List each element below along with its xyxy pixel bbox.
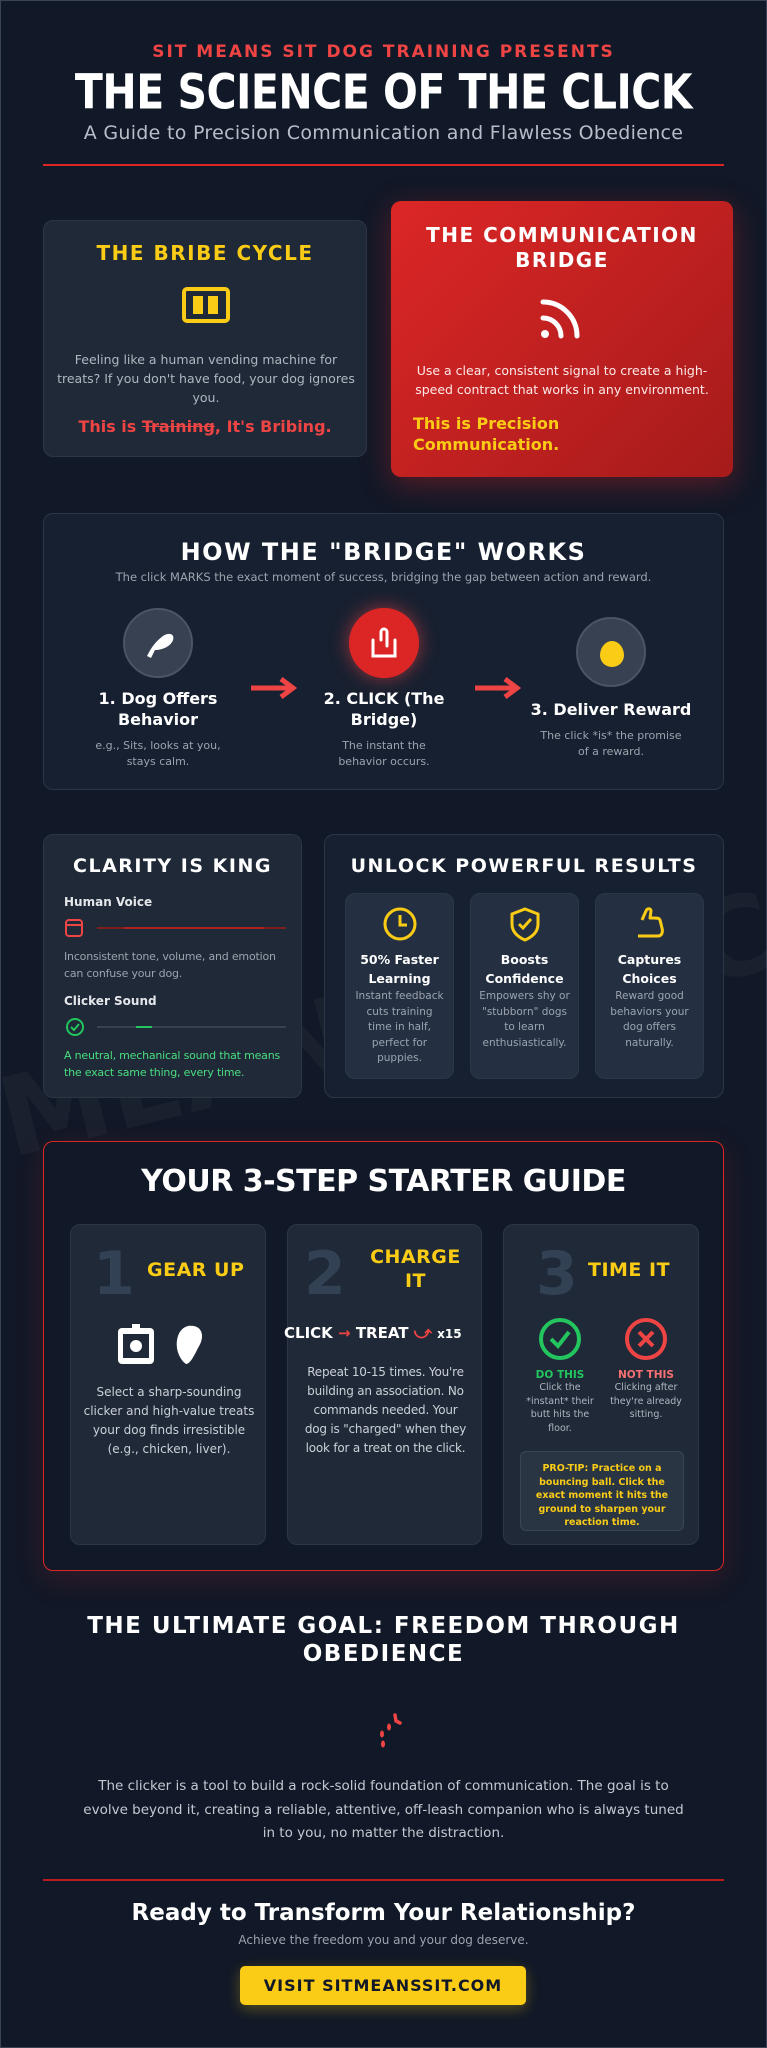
step card 3 xyxy=(503,1224,699,1545)
callout xyxy=(413,414,559,454)
charge formula: CLICK → TREAT ⤻ x15 xyxy=(284,1323,462,1343)
result: confidence: Empowers shy or "stubborn" dogs to learn enthusiastically. xyxy=(479,990,570,1048)
step 2: The instant the xyxy=(342,739,426,752)
step 3: 3. Deliver Reward xyxy=(531,700,691,719)
panel: 3-step starter guide xyxy=(43,1141,724,1571)
text: goal paragraph: The clicker is a tool to build a rock-solid foundation of communication. The goal is to evolve beyond it, creating a reliable, attentive, off-leash companion who is always tuned in to you, no matter the distraction. xyxy=(83,1778,684,1841)
panel: how the bridge works xyxy=(43,513,724,790)
step card 2: 2 xyxy=(304,1239,346,1309)
heading: UNLOCK POWERFUL RESULTS xyxy=(351,855,697,877)
heading: THE COMMUNICATION xyxy=(426,223,698,247)
panel: unlock powerful results xyxy=(324,834,724,1098)
not this: Clicking after they're already sitting. xyxy=(610,1382,682,1420)
pro tip: PRO-TIP: Practice on a bouncing ball. Click the exact moment it hits the ground to sharpen your reaction time. xyxy=(536,1463,668,1528)
step 3 xyxy=(531,617,691,758)
subheading: The click MARKS the exact moment of success, bridging the gap between action and reward. xyxy=(116,570,651,584)
step card 2: CHARGE xyxy=(370,1246,461,1268)
result: faster learning: Instant feedback cuts training time in half, perfect for puppies. xyxy=(355,990,444,1064)
icon: pause box xyxy=(182,287,230,323)
heading: BRIDGE xyxy=(515,248,609,272)
panel: bribe cycle xyxy=(43,220,367,457)
result: faster learning: 50% Faster xyxy=(360,952,439,967)
callout: This is Training, It's Bribing. xyxy=(78,417,332,436)
do this xyxy=(526,1318,594,1434)
button xyxy=(240,1966,526,2005)
callout: Communication. xyxy=(413,435,559,454)
result: confidence: Confidence xyxy=(485,971,564,986)
result: choices: Captures xyxy=(618,952,681,967)
cta subtext: Achieve the freedom you and your dog deserve. xyxy=(238,1933,529,1947)
result: choices: Reward good behaviors your dog offers naturally. xyxy=(610,990,689,1048)
clicker sound: A neutral, mechanical sound that means the exact same thing, every time. xyxy=(64,1049,280,1079)
result: faster learning xyxy=(345,893,454,1079)
human voice: Human Voice xyxy=(64,895,152,909)
step 2 xyxy=(324,596,444,768)
step 3: of a reward. xyxy=(578,745,644,758)
step 1 xyxy=(95,608,221,768)
do this: Click the *instant* their butt hits the floor. xyxy=(526,1382,594,1434)
subtitle: A Guide to Precision Communication and Flawless Obedience xyxy=(84,122,683,144)
heading: THE BRIBE CYCLE xyxy=(96,241,314,265)
result: confidence: Boosts xyxy=(501,952,548,967)
result: choices xyxy=(595,893,704,1079)
step 2: Bridge) xyxy=(351,710,417,729)
pro tip xyxy=(520,1451,684,1531)
step card 3: TIME IT xyxy=(588,1259,670,1281)
icon: signal xyxy=(540,300,580,338)
step 1: stays calm. xyxy=(127,755,189,768)
step card 1: 1 xyxy=(93,1239,135,1309)
step card 1: GEAR UP xyxy=(147,1259,244,1281)
text: Feeling like a human vending machine for treats? If you don't have food, your dog ignores you. xyxy=(57,352,355,405)
text: Use a clear, consistent signal to create a high-speed contract that works in any environment. xyxy=(415,363,709,397)
step card 3: 3 xyxy=(536,1239,578,1309)
not this: NOT THIS xyxy=(618,1369,674,1381)
step 1: 1. Dog Offers xyxy=(99,689,217,708)
step 3: The click *is* the promise xyxy=(540,729,682,742)
clicker sound: Clicker Sound xyxy=(64,994,157,1008)
heading: ultimate goal: THE ULTIMATE GOAL: FREEDOM THROUGH OBEDIENCE xyxy=(87,1613,680,1667)
step 2: behavior occurs. xyxy=(338,755,430,768)
result: faster learning: Learning xyxy=(368,971,431,986)
step card 1 xyxy=(70,1224,266,1545)
step 1: e.g., Sits, looks at you, xyxy=(95,739,221,752)
icon: clicker and treat xyxy=(118,1324,202,1364)
step card 1: Select a sharp-sounding clicker and high-value treats your dog finds irresistible (e.g., chicken, liver). xyxy=(84,1385,254,1456)
title: THE SCIENCE OF THE CLICK xyxy=(75,64,692,120)
not this xyxy=(610,1318,682,1420)
do this: DO THIS xyxy=(536,1369,584,1381)
step card 2: IT xyxy=(405,1270,426,1292)
icon: reward xyxy=(576,617,646,687)
clicker sound xyxy=(64,994,286,1079)
human voice: Inconsistent tone, volume, and emotion can confuse your dog. xyxy=(64,950,276,980)
step card 2: Repeat 10-15 times. You're building an association. No commands needed. Your dog is "charged" when they look for a treat on the click. xyxy=(305,1365,466,1455)
icon: paw trail xyxy=(380,1713,402,1748)
icon: clicker xyxy=(349,608,419,678)
result: choices: Choices xyxy=(622,971,677,986)
icon: paw xyxy=(123,608,193,678)
heading: HOW THE "BRIDGE" WORKS xyxy=(181,538,586,566)
cta heading: Ready to Transform Your Relationship? xyxy=(132,1900,635,1926)
kicker: SIT MEANS SIT DOG TRAINING PRESENTS xyxy=(152,42,615,62)
step 2: 2. CLICK (The xyxy=(324,689,444,708)
heading: CLARITY IS KING xyxy=(73,855,272,877)
panel: communication bridge xyxy=(391,201,733,477)
result: confidence xyxy=(470,893,579,1079)
step 1: Behavior xyxy=(118,710,198,729)
panel: clarity is king xyxy=(43,834,302,1098)
arrow xyxy=(475,677,521,699)
arrow xyxy=(251,677,297,699)
callout: This is Precision xyxy=(413,414,559,433)
human voice xyxy=(64,895,286,980)
heading: YOUR 3-STEP STARTER GUIDE xyxy=(141,1164,626,1199)
step card 2 xyxy=(287,1224,482,1545)
heading xyxy=(426,223,698,272)
button: VISIT SITMEANSSIT.COM xyxy=(264,1976,502,1995)
